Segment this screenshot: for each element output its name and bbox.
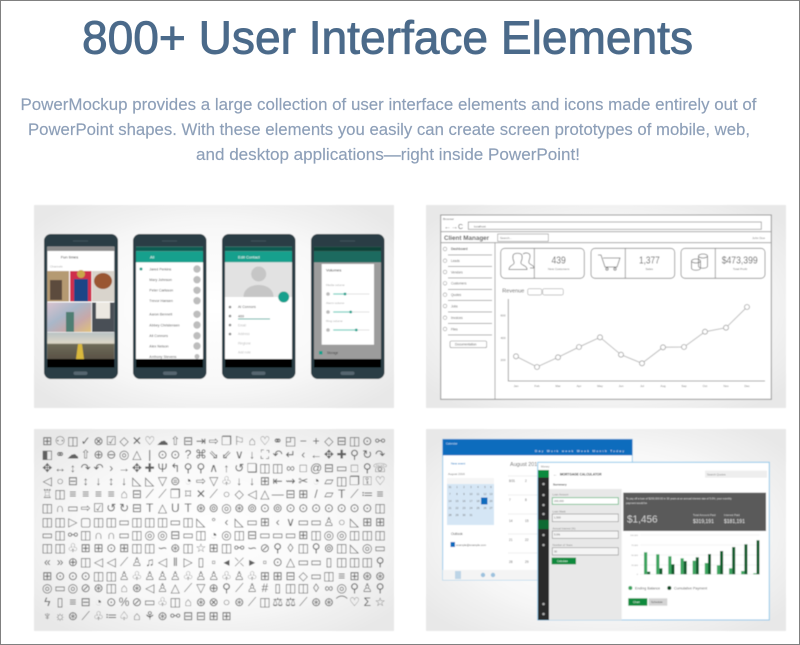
calendar window: 28 [509, 560, 513, 564]
calendar window: 20 [490, 499, 493, 503]
phone 2: contact list: Abbey Christensen [149, 324, 180, 328]
panel: desktop wireframe dashboard [426, 205, 786, 408]
icon grid: ϟ▯≡⊟◔⊙%⊘▭♧◫⌂⊛⊗○⊛⟋◫⚖⚖⟋⊛⊛⌒♡Σ☆ [44, 595, 385, 609]
bar chart: Ending Balance [635, 586, 660, 590]
mortgage calculator window: 1,500 [554, 516, 561, 520]
mortgage calculator window: To pay off a loan of $200,000.00 in 30 years at an annual interest rate of 5.0%, your monthly [626, 496, 732, 500]
sidebar menu: Customers [451, 282, 467, 286]
icon grid: ◁○⊟↕↓↕↓◺◺▽⊜◔⇨▽♧↓↓⊞⇤⇝✂◔▱◫❐⚿♡ [43, 474, 385, 488]
calendar window: New event [451, 462, 465, 466]
calendar window: 4 [477, 485, 479, 489]
calendar window: 13 [490, 492, 493, 496]
revenue line chart: 200 [500, 358, 506, 362]
icon grid: ⊞⊙⊙⊙◫◫♙♧♙♙♙♧♙♙♧♙♧⊞⊞⊟◇▭◫≡⊞⊛⊛ [42, 569, 385, 583]
phone 2: contact list: Mary Johnson [149, 278, 172, 282]
browser window [441, 215, 771, 399]
calendar window: 12 [484, 492, 487, 496]
icon grid [42, 434, 388, 623]
calendar window: 14 [509, 519, 513, 523]
calendar window: 14 [449, 499, 452, 503]
calendar window [443, 439, 632, 580]
sidebar menu: Documentation [455, 343, 477, 347]
revenue line chart: Jun [619, 384, 624, 388]
phone 1: photo gallery: Channels [50, 264, 63, 268]
mortgage calculator window: Interest Paid [724, 513, 740, 517]
stat cards: 1,377 [639, 254, 660, 266]
calendar window: 7 [449, 492, 451, 496]
calendar window: 29 [525, 560, 529, 564]
icon grid: ◫∩▭⇨☑↺↻⊟T△UT⊛⊚◎⊛⊚⊙⊚⊙⊙⊙⊙⊙⊙⊙◫ [42, 501, 386, 515]
revenue line chart: Apr [577, 384, 581, 388]
calendar window: 2 [463, 485, 465, 489]
calendar window: 31 [449, 485, 452, 489]
phone 3: edit contact: 469 [238, 314, 244, 318]
phone 1: photo gallery [44, 234, 118, 379]
icon grid: ✥↔↕↷↶›→✥✚Ψ↰⚲⚲∧↑↺❏◫◫∞□@⊟▭□⚲☏ [42, 461, 388, 475]
phone 4: volume settings dialog: Media volume [326, 283, 345, 287]
sidebar menu: Quotes [451, 293, 462, 297]
calendar window: 5 [484, 485, 486, 489]
stat cards: 439 [552, 254, 566, 266]
revenue line chart: Dec [744, 384, 750, 388]
panel: Windows app mockups [426, 429, 786, 631]
revenue line chart: Aug [660, 384, 666, 388]
calendar window: 27 [490, 506, 493, 510]
intro text: PowerPoint shapes. With these elements you easily can create screen prototypes of mobile, web, [28, 120, 750, 139]
calendar window: 2 [525, 479, 527, 483]
revenue line chart: Jan [514, 384, 519, 388]
icon grid: ▭◫⚯◫∩∩▭◫◎◎⊟▭◫◔◎◫⊟▭▭▭⊞◫◎◎◫◫◫ [42, 528, 386, 542]
phone 2: contact list: Jared Perkins [149, 268, 171, 272]
mortgage calculator window: $181,191 [724, 519, 745, 525]
revenue line chart [500, 288, 765, 388]
calendar window: 17 [470, 499, 473, 503]
intro text [20, 95, 757, 164]
browser window: Client Manager [444, 235, 490, 242]
phone 4: volume settings dialog: Volumes [326, 268, 341, 272]
bar chart: Schedule [651, 600, 663, 604]
browser window: Browser [443, 217, 454, 221]
phone 2: contact list: Aaron Bennett [149, 312, 172, 316]
revenue line chart: Mar [555, 384, 561, 388]
revenue line chart: 400 [500, 336, 506, 340]
browser window: Search... [500, 236, 512, 240]
calendar window: 8 [525, 498, 527, 502]
sidebar menu: Jobs [451, 304, 458, 308]
sidebar menu: Invoices [451, 316, 463, 320]
stat cards: $473,399 [722, 254, 758, 266]
mortgage calculator window: payment would be [626, 501, 648, 505]
sidebar menu: Dashboard [451, 247, 468, 251]
bar chart: Chart [633, 600, 640, 604]
mortgage calculator window: Money [541, 464, 550, 468]
bar chart: 25,000 [631, 565, 639, 567]
phone 3: edit contact: Al Connors [238, 305, 256, 309]
calendar window: 18 [477, 499, 480, 503]
calendar window: 6 [490, 485, 492, 489]
bar chart: 75,000 [631, 545, 639, 547]
stat cards [501, 248, 765, 278]
title: 800+ User Interface Elements [82, 12, 693, 64]
browser window: ←→C [444, 224, 463, 231]
mortgage calculator window: MORTGAGE CALCULATOR [560, 472, 602, 476]
calendar window: August 2016 [510, 462, 540, 468]
panel: icon collection [34, 429, 394, 631]
icon grid: ♖◫≡≡≡≡⌂⊟⟋⟋❐⌑✕⟋○◇◁△—⊟⊞/▱T⟋≔≡ [42, 487, 384, 501]
calendar window: 11 [477, 492, 480, 496]
sidebar menu: Files [451, 327, 458, 331]
phone 3: edit contact: Add note [238, 350, 251, 354]
phone 2: contact list: Peter Carlsson [149, 288, 173, 292]
calendar window: 10 [470, 492, 473, 496]
phone 2: contact list: Anthony Stevens [149, 355, 177, 359]
revenue line chart: Feb [534, 384, 540, 388]
calendar window: 25 [477, 506, 480, 510]
icon grid: ◫◫▷▢◫◫▭◫◫◫▭◫◺°‹◺▭⊞‹∨▭▭♙○◺⊞⊞ [42, 515, 385, 529]
calendar window: 3 [470, 485, 472, 489]
revenue line chart: Nov [723, 384, 729, 388]
mortgage calculator window: Loan Amount [552, 492, 569, 496]
revenue line chart: Revenue [502, 288, 524, 294]
calendar window: August 2016 [448, 472, 465, 476]
phone 3: edit contact [222, 234, 296, 379]
stat cards: Total Profit [733, 267, 747, 271]
phone 1: photo gallery: Fun times [61, 254, 78, 260]
revenue line chart: Jul [640, 384, 644, 388]
calendar window: 22 [456, 506, 459, 510]
phone 4: volume settings dialog: Storage [327, 351, 338, 355]
phone 4: volume settings dialog: Ring volume [326, 319, 343, 323]
calendar window: 7 [509, 498, 511, 502]
calendar window: 8/31 [509, 479, 515, 483]
calendar window: 28 [449, 513, 452, 517]
icon grid: ⊞⚇◫✓⊗☑◇✕♡☁⇧⊟⇥⇨❐⚐⌂♡⚭◰−+◇⊟◫⊙⚯ [42, 434, 385, 448]
bar chart: Cumulative Payment [674, 586, 707, 590]
phone 2: contact list [133, 234, 206, 379]
calendar window: Day Work week Week Month Today [535, 449, 624, 453]
calendar window: 1 [456, 485, 458, 489]
calendar window: 21 [449, 506, 452, 510]
calendar window: example@example.com [456, 543, 487, 547]
calendar window: Outlook [451, 532, 463, 536]
calendar window: 8 [456, 492, 458, 496]
sidebar menu: Vendors [451, 270, 463, 274]
mortgage calculator window: 30 [554, 550, 557, 554]
revenue line chart: Sep [681, 384, 687, 388]
stat cards: New Customers [548, 267, 570, 271]
mortgage calculator window: Annual Interest (%) [552, 526, 576, 530]
phone 2: contact list: Ali Connors [149, 334, 168, 338]
revenue line chart: Oct [703, 384, 707, 388]
icon grid: ◧⚭☁⇧⊕⊖◎△|⊙⊙?⌘⇘⇙∨↓⛶↶↵‹←✥✚⚲↻↷ [42, 448, 385, 462]
stat cards: Sales [646, 267, 654, 271]
phone 3: edit contact: Address [238, 332, 250, 336]
revenue line chart: 600 [500, 314, 506, 318]
sidebar menu [443, 247, 492, 348]
calendar window: 21 [509, 538, 513, 542]
calendar window: 23 [463, 506, 466, 510]
phone 2: contact list: All [150, 254, 155, 260]
revenue line chart: May [597, 384, 603, 388]
mortgage calculator window: $1,456 [627, 514, 658, 526]
icon grid: «»⊕◫◁◁⟋♙♫◁‖▷▯▫◂⤫▸▫⊙△▭▭▯◫◫◫⚲ [44, 555, 384, 569]
mortgage calculator window: Number of Years [552, 543, 573, 547]
mortgage calculator window: Calculate [557, 559, 568, 563]
bar chart: 100,000 [630, 535, 639, 537]
phone 4: volume settings dialog [311, 234, 384, 379]
mortgage calculator window: 5.0% [554, 532, 561, 536]
phone 3: edit contact: Edit Contact [238, 254, 261, 260]
mortgage calculator window: ← [553, 472, 557, 477]
mortgage calculator window: Search Quotes [707, 472, 726, 476]
icon grid: ◫◫♧⊞⊞⊙⊞◫◫∽⊛◫☆⊞◫⚯∽⊘⚲◊◫⚲⊚◫◺◎▭ [42, 541, 386, 555]
bar chart: 50,000 [631, 555, 639, 557]
panel: mobile phone mockups [34, 205, 394, 408]
phone 2: contact list: Trevor Hansen [149, 299, 173, 303]
calendar window: 26 [484, 506, 487, 510]
calendar window: 24 [470, 506, 473, 510]
calendar window: 30 [463, 513, 466, 517]
bar chart: 0 [637, 574, 639, 576]
calendar window: 9 [463, 492, 465, 496]
calendar window: 31 [470, 513, 473, 517]
mortgage calculator window: Summary [553, 482, 567, 486]
browser window: John Doe [752, 236, 765, 240]
calendar window: 15 [456, 499, 459, 503]
mortgage calculator window: Total Amount Paid [693, 513, 716, 517]
sidebar menu: Leads [451, 259, 460, 263]
calendar window: 15 [525, 519, 529, 523]
icon grid: ♆☼⊛⟋♧≔♤⌂⚘⊛⚯⊟⊟⊞⊞ [43, 609, 232, 623]
browser window: localhost [474, 224, 486, 228]
intro text: PowerMockup provides a large collection of user interface elements and icons made entirely out of [20, 95, 757, 114]
phone 2: contact list: Alex Nelson [149, 344, 168, 348]
phone 4: volume settings dialog: Alarm volume [326, 301, 345, 305]
calendar window: 29 [456, 513, 459, 517]
calendar window: 16 [463, 499, 466, 503]
intro text: and desktop applications—right inside PowerPoint! [196, 145, 580, 164]
mortgage calculator window: 200,000 [554, 499, 564, 503]
phone 3: edit contact: Ringtone [238, 342, 251, 346]
icon grid: ◎▭◎⊘⊛◫⌂⊛◁♙△⟋▽⊕⚲⟋♙#▯◫◫◊∞◎⚲♙⚲ [42, 581, 384, 595]
calendar window: 22 [525, 538, 529, 542]
calendar window: Calendar [446, 442, 457, 446]
bar chart [628, 535, 760, 606]
mortgage calculator window [538, 462, 769, 620]
phone 3: edit contact: Email [238, 324, 246, 328]
mortgage calculator window: $319,191 [693, 519, 714, 525]
mortgage calculator window: Loan Mask [552, 510, 566, 514]
